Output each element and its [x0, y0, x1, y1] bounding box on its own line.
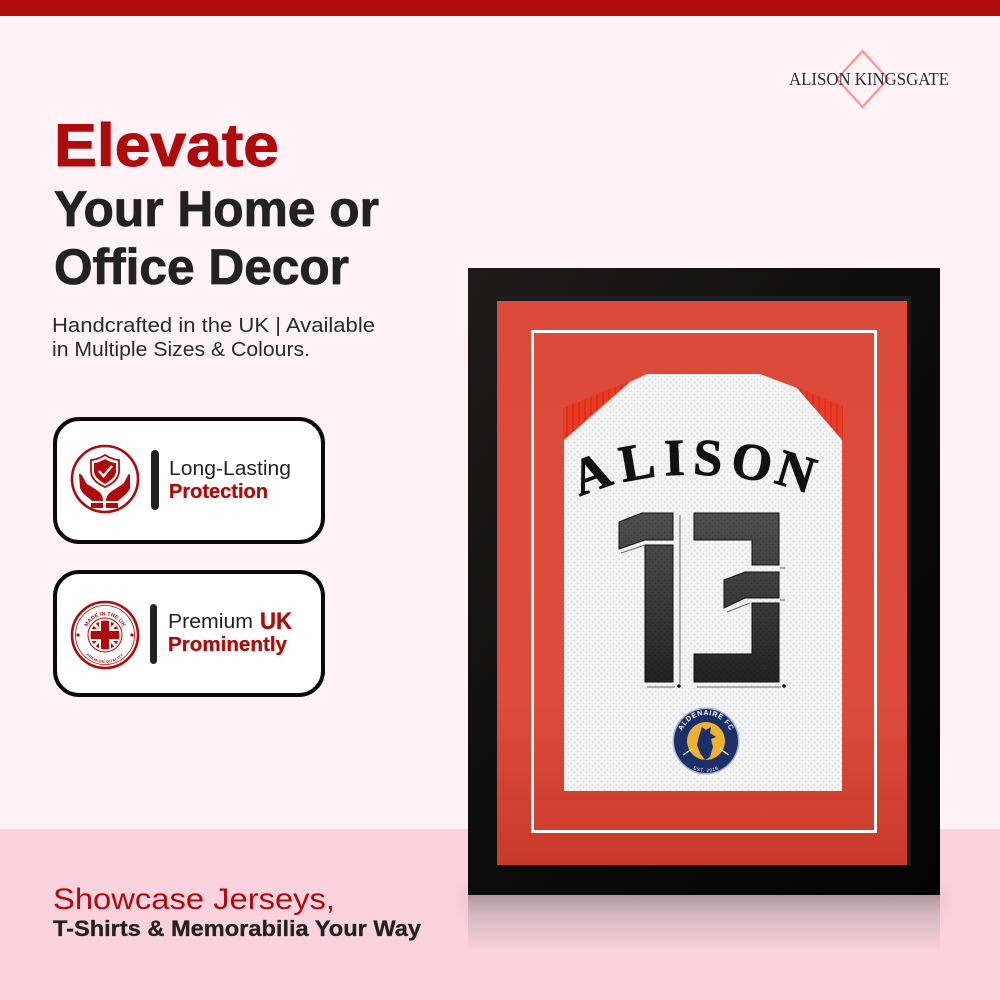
card label: [169, 458, 291, 503]
jersey name: A: [564, 441, 619, 508]
subheading text: [52, 315, 375, 361]
divider pill: [150, 604, 157, 664]
card label: UK: [260, 608, 293, 635]
card label: Premium: [168, 611, 253, 633]
divider pill: [151, 450, 159, 510]
heading accent word: Elevate: [54, 112, 279, 179]
floor band: [0, 829, 1000, 1000]
footer caption: [53, 883, 422, 941]
heading: [54, 112, 379, 295]
digit three: [694, 513, 786, 688]
heading line three: Office Decor: [54, 239, 349, 295]
logo wordmark: ALISON KINGSGATE: [789, 69, 949, 89]
jersey name: O: [727, 431, 777, 494]
jersey name: I: [663, 430, 686, 487]
caption line two: T-Shirts & Memorabilia Your Way: [53, 916, 422, 941]
jersey name: N: [770, 439, 822, 505]
red mat: [497, 301, 907, 865]
caption line one: Showcase Jerseys,: [53, 883, 335, 916]
club crest: [672, 708, 740, 774]
top red bar: [0, 0, 1000, 16]
card label: Protection: [169, 481, 268, 503]
frame floor reflection: [468, 895, 940, 953]
icon: shield in hands: [72, 446, 138, 512]
subheading text: in Multiple Sizes & Colours.: [52, 339, 310, 361]
digit one: [619, 513, 681, 688]
icon: made in the UK seal: [70, 600, 140, 670]
jersey number 13: [619, 513, 786, 688]
jersey name: [564, 429, 822, 508]
card outline: [55, 419, 323, 542]
icon: made in the UK seal: MADE IN THE UK: [84, 612, 126, 627]
black frame: [468, 268, 940, 895]
jersey body: [564, 374, 842, 791]
card label: [168, 608, 293, 656]
jersey sleeves: [563, 380, 843, 441]
panel: premium UK: [53, 570, 325, 697]
framed jersey: [464, 268, 944, 944]
card label: Prominently: [168, 634, 288, 656]
card outline: [55, 572, 323, 695]
panel: long-lasting protection: [55, 419, 323, 542]
logo diamond: [837, 51, 888, 107]
soft glow around frame base: [462, 885, 946, 915]
white inner border: [532, 332, 876, 832]
club crest: EST. 2018: [694, 766, 718, 772]
frame inner lip: [497, 296, 911, 866]
brand logo: [789, 51, 949, 107]
card label: Long-Lasting: [169, 458, 291, 480]
icon: made in the UK seal: PREMIUM QUALITY: [86, 653, 123, 664]
heading line two: Your Home or: [54, 181, 379, 237]
subheading text: Handcrafted in the UK | Available: [52, 315, 375, 337]
jersey name: S: [692, 429, 724, 488]
club crest: ALDENAIRE FC: [678, 710, 734, 731]
jersey name: L: [615, 432, 659, 494]
